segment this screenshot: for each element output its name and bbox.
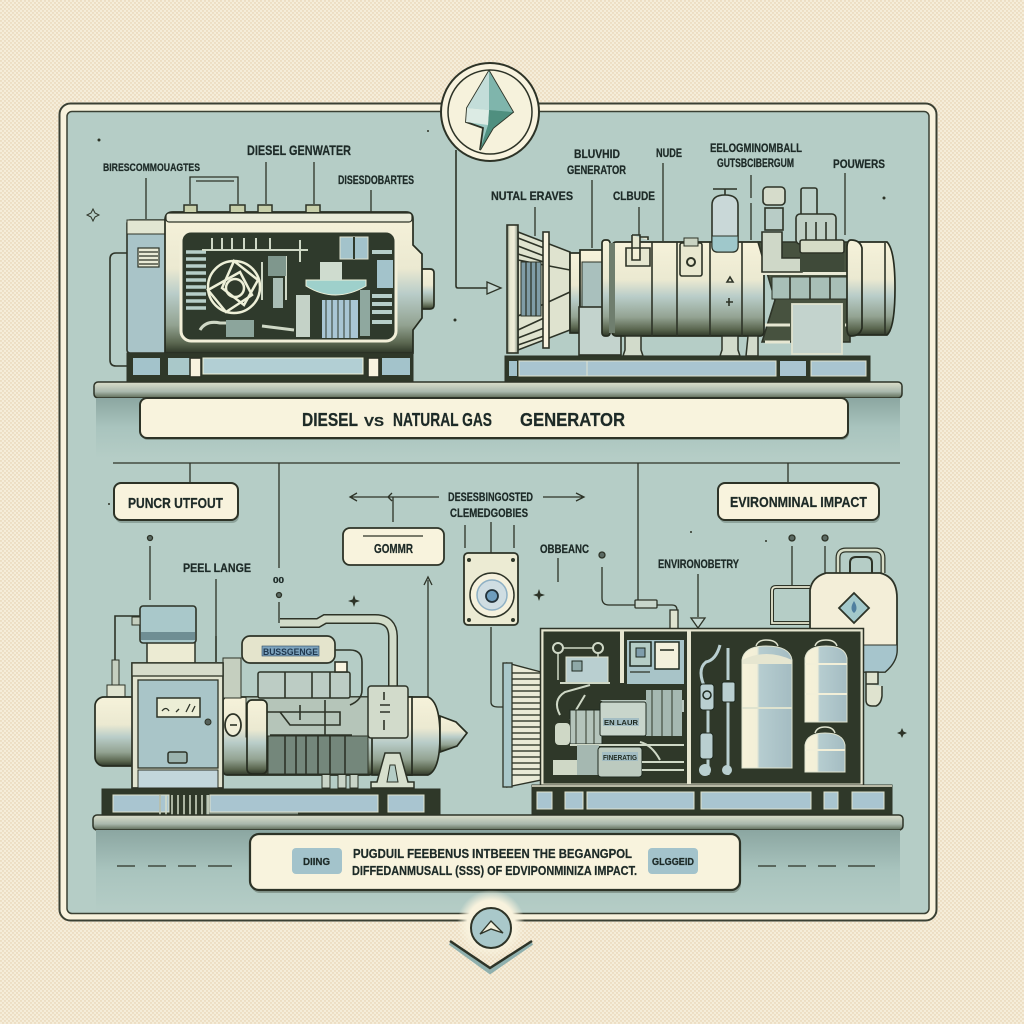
- generator end: [408, 697, 440, 775]
- right shaft cap: [413, 269, 434, 309]
- engine window: [181, 231, 396, 341]
- engine cluster: [553, 685, 684, 777]
- label: blended generator: BLUVHID: [574, 149, 620, 161]
- label: environmentary: ENVIRONOBETRY: [658, 557, 739, 571]
- base frame: [532, 785, 892, 814]
- cabinet: [542, 630, 862, 785]
- icon: speaker-like motor: [464, 553, 518, 625]
- title banner: DIESEL: [302, 410, 358, 430]
- title banner: VS: [364, 414, 384, 429]
- label: node: NUDE: [656, 148, 682, 160]
- feet: [623, 336, 758, 356]
- label: upper left: BIRESCOMMOUAGTES: [103, 162, 200, 174]
- left pipe and plug: [115, 616, 140, 665]
- foot: [371, 753, 414, 788]
- gauge display: [157, 698, 200, 717]
- gas bottle: [712, 189, 738, 252]
- label: guide: CLBUDE: [613, 189, 655, 203]
- diesel generator leader lines: [146, 162, 371, 219]
- callout: cover: [343, 528, 444, 565]
- valve: [626, 235, 650, 266]
- air pipe: [280, 619, 393, 686]
- label: blended generator: [567, 149, 626, 177]
- label: small mark: 00: [273, 576, 285, 585]
- diesel generator bottom-left: [95, 606, 467, 816]
- upper cylinders: [258, 672, 350, 698]
- bracket: [680, 243, 702, 276]
- callout: power output: [114, 483, 239, 523]
- intake fan: [507, 225, 570, 353]
- label: blended generator: GENERATOR: [567, 163, 626, 177]
- left tag: [292, 848, 342, 874]
- icon: top emblem with gem and bolt: [441, 63, 539, 161]
- diesel generator top-left: [110, 205, 434, 382]
- label: gearbox: OBBEANC: [540, 544, 589, 556]
- label: electromechanical: EELOGMINOMBALL: [710, 143, 802, 155]
- left tank: [95, 697, 145, 766]
- label: powers: POUWERS: [833, 157, 885, 171]
- left tag: DIING: [303, 857, 330, 868]
- generator components upper-left: [553, 643, 610, 683]
- engine body: [223, 697, 373, 775]
- label: diesel generator: DIESEL GENWATER: [247, 142, 351, 158]
- label: center description: [448, 490, 533, 520]
- natural gas generator bottom-right: [503, 550, 897, 814]
- bottom note banner: [250, 834, 741, 893]
- label: natural gas left: NUTAL ERAVES: [491, 189, 573, 203]
- gas generator leader lines: [535, 163, 845, 248]
- tall pipes and gauges: [699, 645, 735, 776]
- icon: bottom chevron badge: [450, 890, 532, 972]
- handle: [110, 253, 127, 366]
- compressor assembly: [758, 187, 852, 354]
- engine window internals: [186, 237, 393, 338]
- shelf: lower: [93, 815, 903, 912]
- dial on engine: [225, 714, 241, 736]
- main housing: [165, 212, 422, 353]
- pipe stub: [670, 610, 678, 630]
- arrow: emblem to gas generator: [456, 150, 501, 294]
- section divider lines: [113, 463, 900, 600]
- label: center description: CLEMEDGOBIES: [450, 506, 528, 520]
- bracket behind tank: [772, 587, 810, 623]
- engine cluster: EN LAUR: [604, 720, 638, 727]
- control cabinet: [223, 658, 241, 698]
- title banner: GENERATOR: [520, 410, 625, 430]
- lower leader lines: [148, 522, 828, 707]
- main cylinder: [612, 242, 764, 336]
- base frame: [102, 789, 440, 816]
- louvre grille: [503, 663, 541, 787]
- note text: [352, 846, 637, 878]
- label: electromechanical: GUTSBCIBERGUM: [717, 158, 794, 170]
- shelf: upper: [94, 382, 902, 458]
- panel: main frame: [60, 104, 936, 920]
- callout: environmental impact: EVIRONMINAL IMPACT: [730, 494, 867, 511]
- callout: cover: GOMMR: [374, 542, 413, 556]
- label: right of diesel: DISESDOBARTES: [338, 175, 414, 187]
- small marks: [726, 277, 733, 306]
- top studs: [184, 205, 320, 212]
- sparkles: [87, 130, 907, 738]
- title banner: NATURAL GAS: [393, 410, 492, 430]
- diesel generator bottom-left: BUSSGENGE: [263, 647, 318, 657]
- control panels: [627, 640, 684, 684]
- natural gas turbine generator top-right: [505, 187, 895, 381]
- top air box: [147, 640, 195, 664]
- gearbox: [570, 253, 580, 333]
- arrows: center description: [350, 493, 584, 522]
- tank A: [742, 640, 792, 768]
- label: center description: DESESBINGOSTED: [448, 490, 533, 504]
- right end cap: [851, 242, 895, 335]
- base frame: [127, 353, 413, 382]
- tank B: [805, 640, 847, 722]
- dashes: lower band: [117, 865, 875, 867]
- left cabinet: [127, 220, 167, 353]
- callout: power output: PUNCR UTFOUT: [128, 495, 223, 512]
- connector on pipe: [635, 600, 657, 608]
- right tag: [648, 848, 698, 874]
- right tag: GLGGEID: [652, 857, 694, 868]
- base frame: [505, 356, 870, 381]
- title banner: [140, 398, 849, 440]
- callout: environmental impact: [718, 483, 880, 523]
- label: peel lange: PEEL LANGE: [183, 561, 251, 575]
- note text: PUGDUIL FEEBENUS INTBEEEN THE BEGANGPOL: [353, 846, 632, 861]
- engine cluster: FINERATIG: [603, 755, 638, 762]
- note text: DIFFEDANMUSALL (SSS) OF EDVIPONMINIZA IMPACT.: [352, 863, 637, 878]
- label: electromechanical: [710, 143, 802, 170]
- large gas tank: [810, 550, 897, 706]
- tank C: [805, 727, 845, 772]
